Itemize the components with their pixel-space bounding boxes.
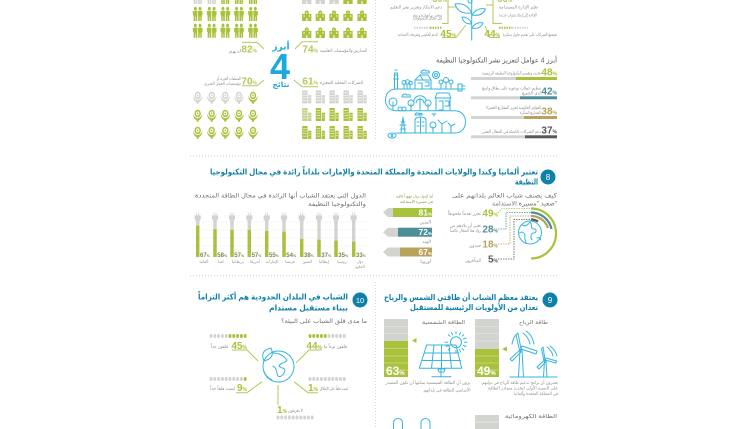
left callout texts: في مجال التكنولوجيا (413, 16, 442, 20)
heading: section 10: ببناء مستقبل مستدام (269, 304, 348, 312)
stat: 5% (465, 254, 499, 266)
callout: 74% (295, 42, 367, 56)
hydro energy label: الطاقة الكهرومائية (505, 413, 558, 420)
panel: section 9 (384, 292, 559, 429)
icon: plant (455, 0, 486, 40)
gauge: wind 49% (475, 319, 507, 378)
plug bar chart: 33% (356, 253, 367, 259)
plug bar chart: كندا (218, 260, 224, 264)
text: wind note: في المملكة المتحدة وألمانيا (514, 390, 558, 396)
stat: 28%: رواد هذا المجال عالمياً (450, 227, 481, 233)
callout: 74%: 74% (302, 44, 319, 56)
icon: solar panel and sun (419, 332, 467, 377)
pencil: 72% (383, 227, 432, 244)
stat: 45%: الدعم الحكومي وتشريعات الاستدامة (398, 32, 438, 38)
icon: wind turbines (510, 331, 557, 377)
factor 48%: تحديد وتعميم التكنولوجيا النظيفة الرئيسية (482, 70, 542, 76)
stat: 1% not at all: 1% (308, 383, 319, 394)
left callout texts: دعم الابتكار وتعزيز نشر التعليم (390, 4, 442, 10)
stat: 1% not at all: لست قلقاً على الإطلاق (320, 385, 348, 392)
factor 42%: لدى الجميع (522, 90, 541, 96)
subheading: sustainability (452, 192, 557, 208)
pencil: 81% (383, 208, 432, 224)
icon grid: charity hands (193, 92, 258, 139)
heading: top 4 results: 4 (270, 46, 290, 87)
wind energy label: طاقة الرياح (519, 320, 548, 326)
subheading: leading countries: الدول التي يعتقد الشباب أنها الرائدة في مجال الطاقة المتجددة (195, 190, 366, 200)
callout: 61% (294, 76, 363, 88)
pencil: 67% (383, 247, 432, 264)
text: wind note: على التنمية الأولى لتحديد مصادر الطاقة (488, 384, 558, 390)
stat: 1% don't know: 1% (277, 405, 288, 416)
heading: section 8 (210, 166, 538, 186)
right callout texts: الحاجة إلى إيجاد تقنيات جديدة (499, 12, 537, 18)
icon: hydro dam outlines (394, 418, 430, 429)
pencil: 67%: أوروبا (420, 258, 432, 264)
factor 38%: 38% (541, 106, 558, 118)
right callout texts (498, 0, 539, 18)
subheading: leading countries: والتكنولوجيا النظيفة (308, 201, 366, 208)
stat: 44%: 44% (484, 29, 501, 40)
bracket lines (442, 0, 502, 38)
badge: 8 (540, 170, 556, 184)
heading: section 8: تعتبر ألمانيا وكندا والولايات المتحدة والمملكة المتحدة والإمارات بلداناً رائدة في مجال التكنولوجيا (210, 166, 538, 176)
plug bar chart: 67% (200, 253, 211, 259)
badge: 8: 8 (546, 173, 551, 182)
text: solar note (385, 379, 471, 394)
left callout texts: توفير برامج تدريبية (413, 12, 443, 18)
solar energy label: الطاقة الشمسية (422, 320, 466, 326)
stat: 44% (484, 28, 558, 40)
plug bar chart: 58% (217, 253, 228, 259)
factor 38%: الحوافز الحكومية لتعزيز المشاريع الخضراء (486, 105, 541, 110)
heading: section 9 (384, 292, 538, 312)
heading: section 9: يعتقد معظم الشباب أن طاقتي الشمس والرياح (384, 292, 538, 303)
stat: 44% concerned (296, 334, 347, 363)
panel: sustainability journey (448, 192, 557, 266)
heading: section 9: تعدان من الأولويات الرئيسية للمستقبل (410, 302, 538, 312)
factor 42% (471, 86, 558, 99)
pencil: 67%: 67% (419, 247, 432, 257)
subheading: sustainability: صعيد "مسيرة الاستدامة" (492, 200, 557, 208)
callout: 82%: لديهم (229, 48, 241, 54)
stat: 9% slightly concerned: 9% (237, 383, 248, 394)
text: solar note: الأساسي للطاقة في بلدانهم (424, 386, 470, 394)
plug bar chart: 57% (234, 253, 245, 259)
badge: 10: 10 (356, 296, 364, 305)
gauge: hydro (475, 415, 499, 429)
stat: 9% slightly concerned: لست قلقاً جداً (210, 385, 235, 391)
callout: 70%: 70% (241, 76, 258, 88)
factor 37%: دعم الشركات الناشئة في المجال التقني (482, 129, 541, 135)
plug bar chart: روسيا (337, 260, 347, 264)
arcs (531, 208, 556, 258)
subheading: leading countries (195, 190, 366, 208)
left callout texts (390, 0, 448, 20)
plug bar chart: أمريكا (250, 259, 260, 264)
stat: 9% slightly concerned (210, 377, 262, 394)
plug bar chart: بريطانيا (232, 260, 244, 264)
heading: top 4 factors: أبرز 4 عوامل لتعزيز نشر التكنولوجيا النظيفة (436, 56, 557, 64)
pencil: 72%: 72% (419, 227, 432, 237)
factor 48% (471, 68, 558, 80)
panel: country sustainability pencils (383, 193, 433, 264)
gauge: solar 63%: 63% (386, 364, 405, 378)
plug bar chart: الخليج (355, 265, 365, 269)
heading: section 10: الشباب في البلدان الحدودية هم أكثر التزاماً (197, 291, 348, 302)
stat: 45%: 45% (440, 29, 457, 40)
factor 38% (471, 105, 558, 119)
callout: 82% (229, 42, 264, 56)
plug bar chart (190, 212, 368, 269)
plug bar chart: 57% (252, 253, 262, 259)
stat: 1% don't know: لا يعرفون (288, 408, 303, 413)
panel: top results, four key findings (193, 0, 367, 139)
text: solar note: يرون أن الطاقة الشمسية يمكنها أن تكون المصدر (385, 379, 471, 385)
plug bar chart: الصين (302, 260, 312, 264)
stat: 44% concerned: 44% (306, 341, 323, 352)
subheading: sustainability: كيف يصنف شباب العالم بلدانهم على (452, 192, 557, 200)
plug bar chart: فرنسا (285, 260, 295, 264)
illustration: clean technology city (386, 70, 466, 138)
callout: 61%: الشركات المحلية الصغيرة (320, 80, 363, 85)
factor 37%: 37% (541, 126, 558, 136)
plug bar chart: 37% (321, 253, 332, 259)
panel: section 10 (197, 291, 368, 420)
stat: 18%: جيدون (469, 243, 481, 248)
heading: section 8: النظيفة (515, 178, 538, 186)
factor 48%: 48% (541, 68, 558, 78)
plug bar chart: دول (357, 260, 363, 264)
pencil: 81%: الصين (419, 220, 431, 224)
stat: 28%: 28% (482, 224, 499, 236)
factor 37% (471, 126, 558, 138)
factor 42%: 42% (541, 86, 558, 98)
subheading: concern: ما مدى قلق الشباب على البيئة؟ (281, 318, 367, 325)
stat: 45% very concerned: قلقون جداً (211, 343, 228, 349)
plug bar chart: 54% (286, 253, 297, 259)
stat: 45% (398, 28, 457, 40)
heading: section 10 (197, 291, 348, 312)
stat: 5%: 5% (488, 254, 499, 266)
icon grid: office buildings (302, 90, 367, 139)
text: wind note (482, 379, 559, 396)
stat: 28%: تعتبر أن بلادهم من (450, 222, 482, 229)
heading: top 4 results: أبرز (271, 40, 290, 52)
callout: 74%: المدارس والمؤسسات التعليمية (320, 48, 367, 53)
heading: top 4 results: نتائج (273, 80, 290, 89)
pencil: 81%: 81% (419, 208, 432, 218)
callout: 70%: المنظمات الخيرية أو (216, 75, 241, 81)
plug bar chart: 38% (304, 253, 315, 259)
panel: plant skills diagram (390, 0, 558, 40)
icon: globe and leaf (263, 348, 294, 382)
icon grid: schools (302, 0, 367, 38)
stat: 44%: تشجيع الشركات على تقديم حلول مبتكرة (503, 32, 558, 38)
panel: section 8 (190, 166, 557, 269)
pencil caption: في مسيرة الاستدامة (400, 200, 433, 204)
gauge: solar 63% (384, 319, 416, 378)
icon: globe (518, 221, 542, 244)
plug bar chart: إيطاليا (319, 260, 329, 265)
icon grid: young people (193, 0, 258, 38)
callout: 70%: مؤسسات العمل الخيري (204, 81, 241, 86)
stat: 1% don't know (276, 385, 314, 420)
stat: 49% (448, 208, 499, 220)
stat: 1% not at all (294, 377, 348, 394)
factor 38%: المشاريع المبتكرة (520, 110, 541, 115)
right callout texts: تعلم الإدارة المستدامة (499, 4, 539, 10)
pencil: 72%: الهند (422, 239, 431, 244)
stat: 45% very concerned: 45% (231, 341, 248, 352)
dotted connectors (498, 208, 531, 259)
callout: 61%: 61% (302, 76, 319, 88)
pencil caption (396, 193, 433, 204)
stat: 28% (450, 222, 499, 236)
badge: 9 (542, 292, 558, 308)
stat: 49%: تحرز تقدماً ملحوظاً (448, 210, 482, 216)
callout: 82%: 82% (241, 44, 258, 56)
callout: 70% (204, 75, 264, 88)
factor 42%: تنظيم حملات توعوية على نطاق واسع (482, 86, 542, 92)
stat: 49%: 49% (482, 208, 499, 220)
plug bar chart: الإمارات (266, 260, 278, 265)
stat: 45% very concerned (210, 334, 258, 361)
stat: 5%: المتأخرون (465, 257, 481, 263)
stat: 18%: 18% (482, 240, 499, 250)
badge: 9: 9 (548, 296, 553, 305)
pencil caption: أيّ الدول تبذل جهوداً كافية (396, 193, 433, 198)
plug bar chart: ألمانيا (200, 259, 208, 264)
gauge: wind 49%: 49% (477, 364, 496, 378)
stat: 44% concerned: قلقون نوعاً ما (324, 343, 347, 349)
text: wind note: يعتبرون أن برامج تدعيم طاقة الرياح في دولتهم (482, 379, 559, 386)
bar list: factors (471, 68, 558, 138)
plug bar chart: 35% (338, 253, 349, 259)
stat: 18% (469, 240, 499, 250)
plug bar chart: 55% (269, 253, 280, 259)
badge: 10 (352, 292, 368, 308)
